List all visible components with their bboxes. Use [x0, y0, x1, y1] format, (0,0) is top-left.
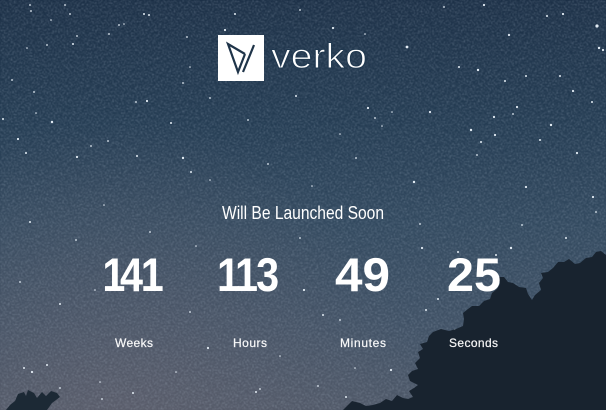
- logo wordmark: verko: [271, 37, 367, 76]
- logo mark: [218, 35, 264, 81]
- countdown: weeks: 141: [102, 250, 164, 302]
- countdown: minutes: Minutes: [340, 336, 386, 350]
- countdown: hours: 113: [217, 250, 279, 302]
- countdown: seconds: [447, 248, 501, 350]
- countdown: seconds: Seconds: [449, 336, 498, 350]
- tagline: Will Be Launched Soon: [222, 203, 384, 223]
- tree silhouette right: [343, 251, 606, 410]
- tree silhouette bottom left: [6, 390, 60, 410]
- countdown: weeks: Weeks: [115, 336, 153, 350]
- countdown: seconds: 25: [447, 248, 501, 301]
- countdown: minutes: [335, 248, 390, 350]
- countdown: hours: [217, 250, 279, 350]
- countdown: minutes: 49: [335, 248, 390, 301]
- countdown: weeks: [102, 250, 164, 350]
- logo: [218, 35, 367, 81]
- countdown: hours: Hours: [233, 336, 267, 350]
